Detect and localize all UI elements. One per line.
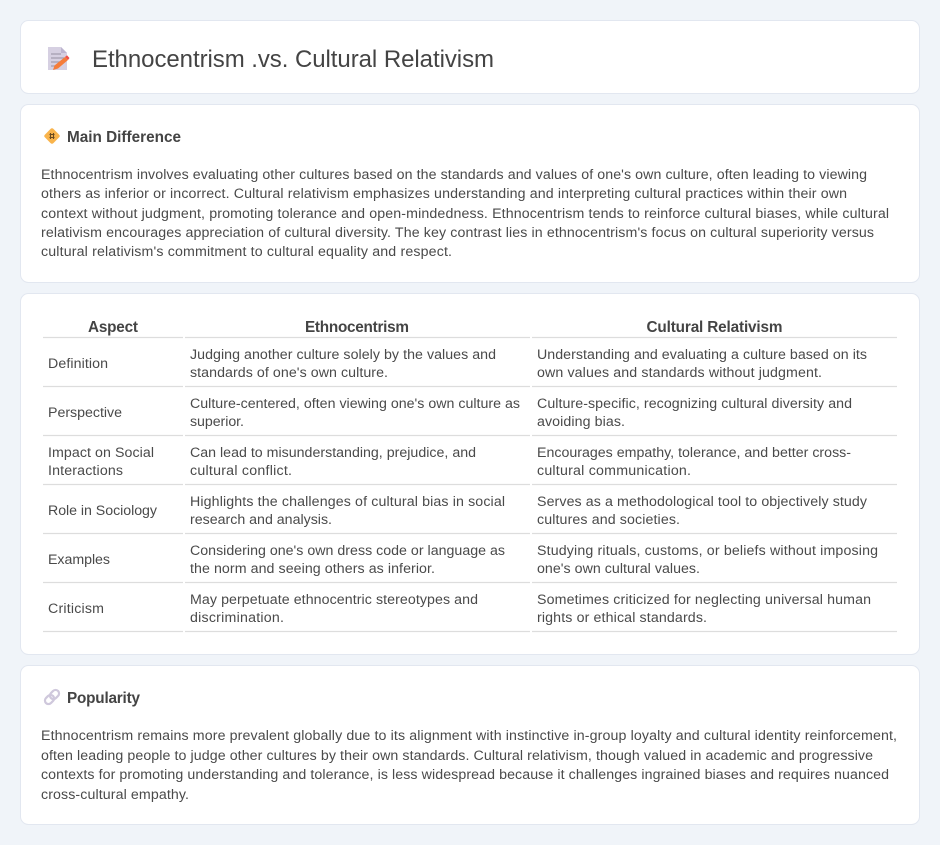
table row: impact on social interactions: Impact on Social bbox=[48, 445, 154, 461]
panel: main difference bbox=[20, 104, 920, 282]
table row: role in sociology: Role in Sociology bbox=[48, 503, 158, 519]
table row: perspective: avoiding bias. bbox=[537, 414, 625, 430]
table row: examples: one's own cultural values. bbox=[537, 561, 700, 577]
text block: popularity paragraph: often leading people to judge other cultures by their own standards. Cultural relativism, though valued in academic and progressive bbox=[41, 748, 873, 764]
table header row: Cultural Relativism bbox=[646, 319, 782, 336]
table row: impact on social interactions: Encourages empathy, tolerance, and better cross- bbox=[537, 445, 851, 461]
table row: criticism: May perpetuate ethnocentric stereotypes and bbox=[190, 592, 478, 608]
table row: perspective: Culture-centered, often viewing one's own culture as bbox=[190, 396, 520, 412]
table row: perspective: Perspective bbox=[48, 405, 122, 421]
table row: impact on social interactions: cultural communication. bbox=[537, 463, 691, 479]
table header row: Aspect bbox=[88, 319, 138, 336]
text block: main difference paragraph: cultural relativism's commitment to cultural equality and respect. bbox=[41, 244, 452, 260]
table row: definition: Understanding and evaluating a culture based on its bbox=[537, 347, 867, 363]
title: Ethnocentrism .vs. Cultural Relativism bbox=[92, 46, 494, 73]
text block: main difference paragraph: others as inferior or incorrect. Cultural relativism emphasizes understanding and interpreting cultural practices within their own bbox=[41, 186, 847, 202]
icon: diamond sign bbox=[44, 128, 60, 144]
table header row bbox=[88, 319, 782, 336]
text block: main difference paragraph: relativism encourages appreciation of cultural diversity. The key contrast lies in ethnocentrism's focus on cultural superiority versus bbox=[41, 225, 874, 241]
table row: definition: own values and standards without judgment. bbox=[537, 365, 822, 381]
table row: impact on social interactions bbox=[48, 445, 851, 479]
table row: examples: the norm and seeing others as inferior. bbox=[190, 561, 435, 577]
table row: definition bbox=[48, 347, 867, 381]
table row: criticism bbox=[48, 592, 871, 626]
table row: role in sociology: cultures and societies. bbox=[537, 512, 680, 528]
icon: document with pencil bbox=[48, 47, 70, 70]
table row: examples bbox=[48, 543, 878, 577]
table row: role in sociology: research and analysis. bbox=[190, 512, 332, 528]
table row: perspective: superior. bbox=[190, 414, 244, 430]
table row: criticism: rights or ethical standards. bbox=[537, 610, 707, 626]
panel: title card bbox=[20, 20, 920, 94]
text block: main difference paragraph bbox=[41, 167, 889, 260]
table row: definition: Definition bbox=[48, 356, 108, 372]
table row: examples: Studying rituals, customs, or beliefs without imposing bbox=[537, 543, 878, 559]
table row: examples: Examples bbox=[48, 552, 110, 568]
text block: popularity paragraph: contexts for promoting understanding and tolerance, is less widespread because it challenges ingrained biases and requires nuanced bbox=[41, 767, 889, 783]
table row: impact on social interactions: cultural conflict. bbox=[190, 463, 292, 479]
panel: comparison table bbox=[20, 294, 920, 654]
table row: definition: standards of one's own culture. bbox=[190, 365, 388, 381]
table row: definition: Judging another culture solely by the values and bbox=[190, 347, 496, 363]
table row: impact on social interactions: Can lead to misunderstanding, prejudice, and bbox=[190, 445, 476, 461]
table row: role in sociology bbox=[48, 494, 868, 528]
icon: chain link bbox=[43, 688, 61, 706]
table row: criticism: discrimination. bbox=[190, 610, 284, 626]
text block: popularity paragraph: cross-cultural empathy. bbox=[41, 787, 189, 803]
table row: criticism: Criticism bbox=[48, 601, 104, 617]
table row: role in sociology: Highlights the challenges of cultural bias in social bbox=[190, 494, 505, 510]
table row: impact on social interactions: Interactions bbox=[48, 463, 123, 479]
table header row: Ethnocentrism bbox=[305, 319, 409, 336]
table row: perspective: Culture-specific, recognizing cultural diversity and bbox=[537, 396, 852, 412]
heading: main difference: Main Difference bbox=[67, 129, 181, 146]
table row: perspective bbox=[48, 396, 852, 430]
table row: criticism: Sometimes criticized for neglecting universal human bbox=[537, 592, 871, 608]
text block: main difference paragraph: context without judgment, promoting tolerance and open-mindedness. Ethnocentrism tends to reinforce cultural biases, while cultural bbox=[41, 206, 889, 222]
text block: main difference paragraph: Ethnocentrism involves evaluating other cultures based on the standards and values of one's own culture, often leading to viewing bbox=[41, 167, 867, 183]
table row: role in sociology: Serves as a methodological tool to objectively study bbox=[537, 494, 868, 510]
table row: examples: Considering one's own dress code or language as bbox=[190, 543, 505, 559]
text block: popularity paragraph bbox=[41, 728, 897, 803]
panel: popularity bbox=[20, 666, 920, 824]
text block: popularity paragraph: Ethnocentrism remains more prevalent globally due to its alignment with instinctive in-group loyalty and cultural identity reinforcement, bbox=[41, 728, 897, 744]
heading: popularity: Popularity bbox=[67, 690, 140, 707]
